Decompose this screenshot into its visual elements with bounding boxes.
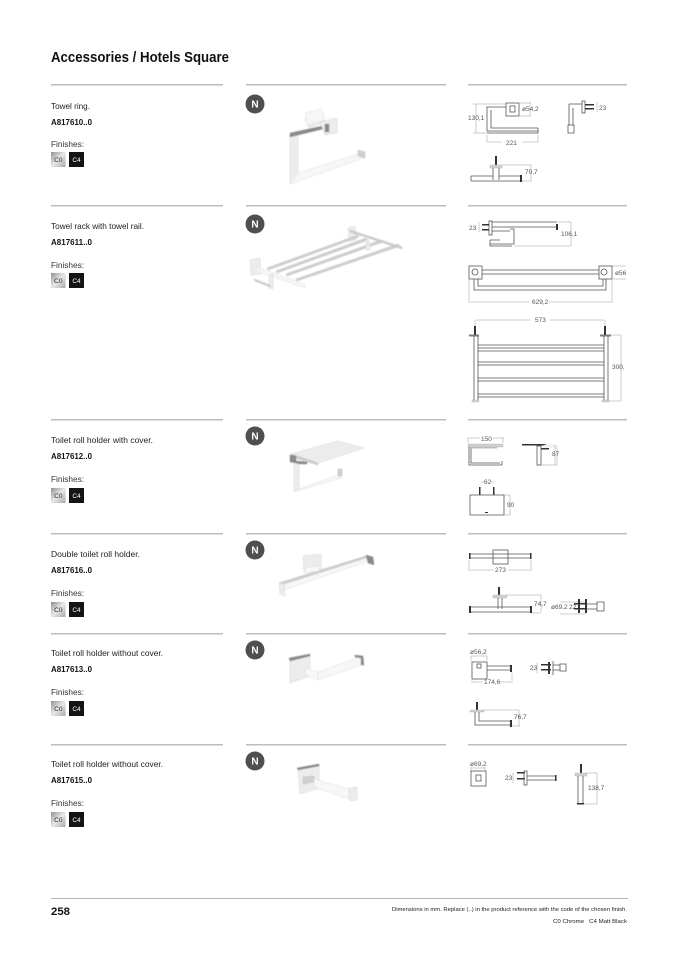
product description: toilet roll holder without cover 1: A817613..0 (51, 664, 92, 674)
technical drawing: double toilet roll holder (469, 550, 604, 614)
footer (51, 898, 628, 925)
technical drawing: towel ring: 70,7 (525, 169, 538, 176)
footnote: dimensions: Dimensions in mm. Replace (..) in the product reference with the code of the chosen finish. (392, 907, 627, 913)
technical drawing: towel rack: 106,1 (561, 231, 578, 238)
technical drawing: towel ring: 130,1 (468, 115, 485, 122)
product description: towel rack (51, 221, 144, 288)
product photo: towel ring (290, 109, 365, 184)
panel: towel rack (51, 205, 627, 402)
technical drawing: towel rack: ø56 (615, 270, 627, 277)
technical drawing: double toilet roll holder: 22 (569, 604, 577, 611)
technical drawing: toilet roll holder with cover: 62 (484, 479, 492, 486)
product description: double toilet roll holder: Finishes: (51, 588, 84, 598)
technical drawing: towel ring: 23 (599, 105, 607, 112)
technical drawing: towel rack: 573 (535, 317, 546, 324)
technical drawing: towel rack: 300, (612, 364, 625, 371)
new badge (246, 94, 264, 114)
product description: towel ring (51, 101, 92, 167)
product description: double toilet roll holder (51, 549, 140, 617)
technical drawing: toilet roll holder without cover 2: ø69,2 (470, 761, 487, 768)
technical drawing: toilet roll holder with cover: 87 (552, 451, 560, 458)
panel: towel ring (51, 84, 627, 184)
page number: 258 (51, 906, 70, 918)
new badge (246, 426, 264, 446)
technical drawing: towel rack: 23 (469, 225, 477, 232)
technical drawing: towel ring: 221 (506, 140, 517, 147)
technical drawing: toilet roll holder without cover 1: 174,6 (484, 679, 501, 686)
technical drawing: towel ring (468, 101, 607, 182)
product description: towel ring: A817610..0 (51, 117, 92, 127)
product photo: towel rack (250, 226, 402, 289)
technical drawing: toilet roll holder with cover (468, 436, 560, 515)
product description: towel ring: Finishes: (51, 139, 84, 149)
legend: finish codes: C0 Chrome C4 Matt Black (553, 919, 627, 925)
technical drawing: double toilet roll holder: 74,7 (534, 601, 547, 608)
product description: toilet roll holder without cover 1: Toilet roll holder without cover. (51, 648, 163, 658)
product description: toilet roll holder without cover 1: Finishes: (51, 687, 84, 697)
technical drawing: toilet roll holder with cover: 150 (481, 436, 492, 443)
product description: towel rack: Towel rack with towel rail. (51, 221, 144, 231)
product photo: toilet roll holder without cover 1 (289, 654, 364, 683)
technical drawing: toilet roll holder without cover 1: ø56,2 (470, 649, 487, 656)
product description: double toilet roll holder: Double toilet roll holder. (51, 549, 140, 559)
new badge (246, 540, 264, 560)
new badge (246, 752, 264, 770)
product photo: toilet roll holder without cover 2 (297, 764, 357, 801)
product description: toilet roll holder with cover: Toilet roll holder with cover. (51, 435, 153, 445)
title: Accessories / Hotels Square (51, 50, 229, 66)
product description: toilet roll holder without cover 2: Finishes: (51, 798, 84, 808)
panel: toilet roll holder with cover (51, 419, 627, 515)
product description: toilet roll holder with cover (51, 435, 153, 503)
technical drawing: towel rack (469, 221, 627, 402)
product description: toilet roll holder without cover 2: Toilet roll holder without cover. (51, 759, 163, 769)
product description: towel rack: A817611..0 (51, 237, 92, 247)
technical drawing: toilet roll holder without cover 1: 76,7 (514, 714, 527, 721)
product photo: double toilet roll holder (279, 554, 374, 596)
technical drawing: toilet roll holder without cover 1: 23 (530, 665, 538, 672)
technical drawing: toilet roll holder with cover: 90 (507, 502, 515, 509)
product description: toilet roll holder without cover 2: A817615..0 (51, 775, 92, 785)
technical drawing: towel ring: ø54,2 (522, 106, 539, 113)
product description: towel ring: Towel ring. (51, 101, 90, 111)
technical drawing: double toilet roll holder: 273 (495, 567, 506, 574)
technical drawing: toilet roll holder without cover 2 (470, 761, 605, 804)
technical drawing: toilet roll holder without cover 1 (470, 649, 566, 727)
panel: double toilet roll holder (51, 533, 627, 617)
product description: toilet roll holder without cover 1 (51, 648, 163, 716)
product description: toilet roll holder with cover: A817612..0 (51, 451, 92, 461)
product description: double toilet roll holder: A817616..0 (51, 565, 92, 575)
panel: toilet roll holder without cover 2 (51, 744, 627, 827)
new badge (246, 640, 264, 660)
technical drawing: toilet roll holder without cover 2: 138,7 (588, 785, 605, 792)
technical drawing: double toilet roll holder: ø69,2 (551, 604, 568, 611)
product description: toilet roll holder without cover 2 (51, 759, 163, 827)
panel: toilet roll holder without cover 1 (51, 633, 627, 727)
product photo: toilet roll holder with cover (290, 441, 364, 491)
technical drawing: toilet roll holder without cover 2: 23 (505, 775, 513, 782)
technical drawing: towel rack: 629,2 (532, 299, 549, 306)
product description: towel rack: Finishes: (51, 260, 84, 270)
new badge (246, 214, 264, 234)
product description: toilet roll holder with cover: Finishes: (51, 474, 84, 484)
